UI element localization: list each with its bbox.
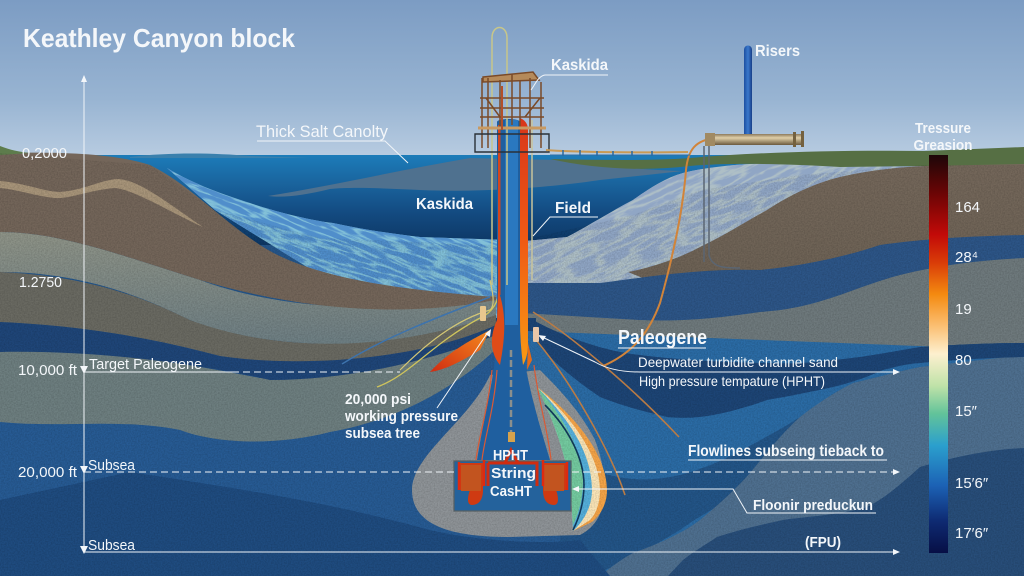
callout: subsea tree: 20,000 psi [345,391,411,408]
coastal vegetation [550,147,1024,169]
wellhead [508,432,515,442]
grain overlay [0,150,1024,576]
far ridge highlight [130,154,310,158]
dashed centre string [510,350,512,432]
sea [60,155,1024,245]
callout: paleogene: Deepwater turbidite channel sand [638,354,838,370]
label: thick salt: Thick Salt Canolty [256,123,389,141]
legend values: 28⁴ [955,249,978,266]
sky background [0,0,1024,165]
right lower dark band [540,410,850,576]
production platform [475,72,549,152]
reservoir bulb [412,370,605,537]
legend values: 164 [955,199,980,216]
left salt body [167,168,497,318]
left deep blue wedge [0,472,610,576]
label: flowlines: Flowlines subseing tieback to [688,443,884,460]
central fill behind wellbore [490,318,536,380]
right dark blue band [533,320,1024,418]
legend title: Greasion [914,137,972,154]
wellbore [476,28,551,460]
left lower blue base [0,330,560,576]
right upper brown layer [628,164,1024,285]
label: kaskida: Kaskida [416,196,473,213]
legend values: 15′6″ [955,475,989,492]
cross-section geology [0,146,1024,576]
subsurface flowlines [342,138,740,495]
label: field: Field [555,200,591,217]
surface pipe [705,131,804,147]
right tree [543,460,567,505]
depth scale labels [18,146,202,554]
depth scale labels: 20,000 ft [18,465,77,481]
legend colour bar [929,155,948,553]
right salt body [528,164,924,283]
callout: paleogene: Paleogene [618,327,707,349]
seabed ridge [268,158,683,197]
equipment label: HPHT [493,448,528,464]
left grey layer light [0,232,496,344]
title: Keathley Canyon block [23,23,296,53]
tan stripe [0,179,203,227]
depth axis [80,76,899,554]
riser [744,46,752,140]
legend values: 17′6″ [955,525,989,542]
hot casing string [520,118,528,365]
left lower grey layer [0,330,500,442]
HPHT equipment [454,432,571,511]
label: FPU: (FPU) [805,534,841,551]
callout: paleogene [618,327,838,389]
pressure legend [914,120,989,553]
label: production: Floonir preduckun [753,497,873,514]
legend title: Tressure [915,120,971,137]
equipment label: CasHT [490,484,532,500]
reservoir crescent [537,387,607,531]
callout: subsea tree [344,391,458,442]
legend values: 19 [955,301,972,318]
label: kaskida top: Kaskida [551,57,608,74]
right grey-blue rock [600,355,1024,576]
depth scale labels: Target Paleogene [89,357,202,373]
legend values [955,199,989,542]
callout: subsea tree: subsea tree [345,425,420,442]
right lower blue base [500,330,1024,576]
export flowline [546,150,690,156]
label: risers: Risers [755,43,800,60]
callout: subsea tree: working pressure [344,408,458,425]
coast edge [0,146,30,155]
u-tube riser [492,28,507,285]
legend values: 15″ [955,403,978,420]
left grey layer dark [0,272,496,361]
equipment label: String [491,466,536,482]
centre manifold [488,450,537,486]
depth scale labels: 10,000 ft [18,363,77,379]
leader arrowheads [485,329,579,492]
depth scale labels: 0,2000 [22,146,67,162]
left brown layer [0,153,496,310]
hot flare right [527,343,532,370]
left blue band [0,322,496,380]
depth scale labels: 1.2750 [19,275,62,291]
depth scale labels: Subsea [88,538,136,554]
subsea valves [480,306,539,342]
hot flare left [492,290,504,365]
equipment label [490,448,536,500]
right deep blue [668,448,1024,576]
legend title [914,120,972,154]
right textured blue band [520,235,1024,321]
right grey band [520,258,1024,363]
depth scale labels: Subsea [88,458,136,474]
leader lines [257,75,887,513]
reservoir arc line [545,405,584,530]
tubing lines [476,365,551,460]
left tree [459,460,484,505]
callout: paleogene: High pressure tempature (HPHT) [639,373,825,389]
legend values: 80 [955,352,972,369]
